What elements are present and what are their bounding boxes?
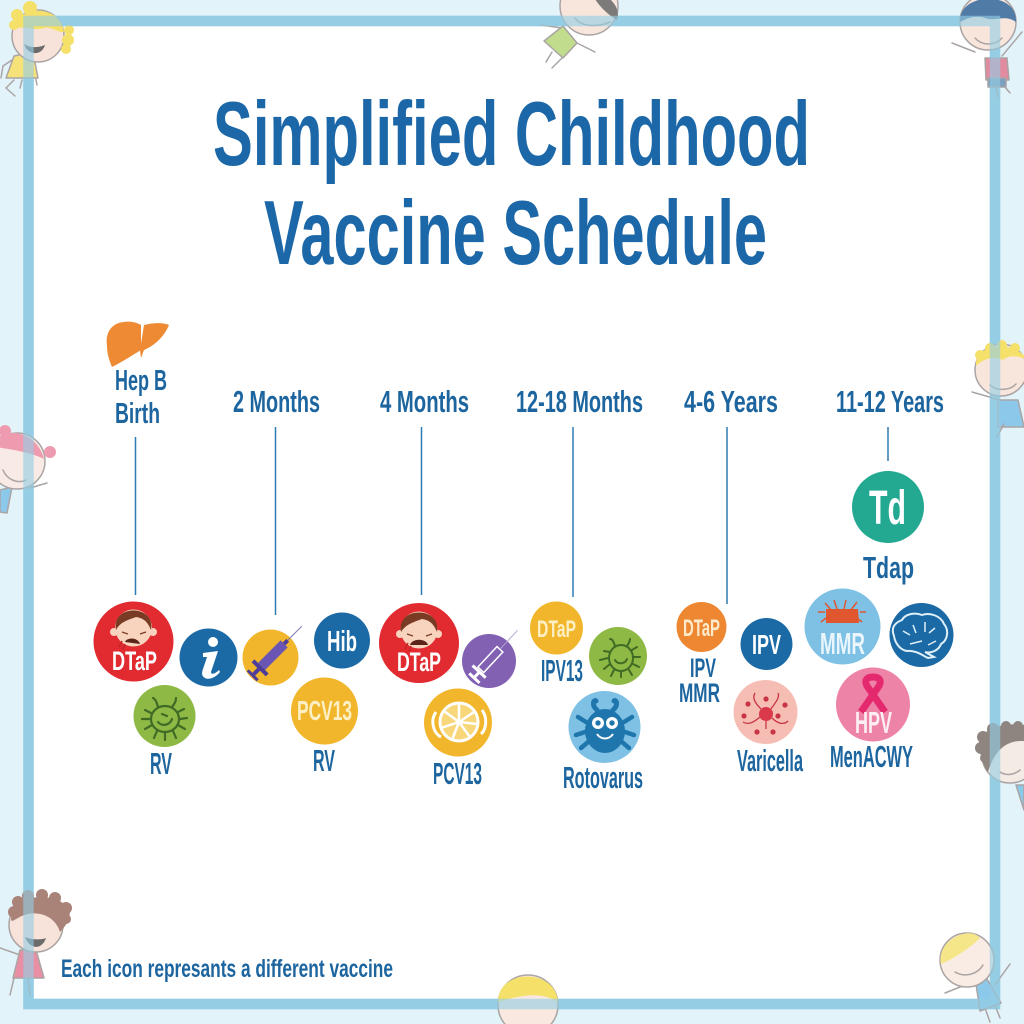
icon: DTaP yellow: DTaP — [537, 616, 576, 643]
icon: Hib — [314, 612, 370, 668]
label: 2 Months: 2 Months — [233, 384, 320, 419]
icon: IPV: IPV — [752, 629, 781, 660]
title — [213, 84, 810, 284]
icon: brain — [890, 603, 954, 667]
decoration: child right upper — [972, 340, 1024, 437]
icon: MMR — [804, 588, 880, 664]
icon: HPV ribbon — [836, 668, 910, 742]
icon: Td: Td — [869, 482, 906, 535]
label: 11-12 Years: 11-12 Years — [836, 384, 944, 419]
label: 4 Months: 4 Months — [380, 384, 469, 419]
decoration: child top right — [952, 0, 1022, 97]
label: IPV MMR: IPV — [690, 653, 716, 683]
icon: Varicella virus — [734, 680, 798, 744]
label: IPV MMR: MMR — [679, 678, 720, 708]
decoration: child bottom centre — [498, 975, 558, 1024]
icon: syringe on purple — [462, 624, 524, 688]
decoration: child top centre — [541, 0, 618, 68]
icon: DTaP orange: DTaP — [683, 615, 720, 642]
label: Varicella: Varicella — [737, 743, 803, 778]
decoration: child left — [0, 425, 56, 513]
icon: DTaP yellow — [530, 602, 583, 654]
footnote: Each icon represants a different vaccine — [61, 955, 393, 983]
icon: PCV13: PCV13 — [297, 695, 352, 726]
icon: MMR: MMR — [820, 626, 865, 661]
icon: DTaP red with sick child — [94, 602, 174, 682]
timeline connector lines — [136, 427, 888, 615]
label: Hep B Birth — [115, 365, 167, 430]
icon: syringe on yellow — [242, 619, 309, 686]
decoration: child top left — [1, 1, 74, 96]
icon: green bug — [589, 627, 647, 685]
icon: DTaP orange — [676, 602, 726, 652]
label: RV second: RV — [313, 743, 335, 778]
icon: DTaP red second dose: DTaP — [397, 647, 441, 677]
icon: Rotavirus bug — [568, 691, 640, 763]
label: Hep B Birth: Birth — [115, 398, 160, 430]
icon: RV green bug — [134, 685, 196, 747]
label: Hep B Birth: Hep B — [115, 365, 167, 397]
label: Tdap: Tdap — [863, 550, 914, 585]
icon: Hib: Hib — [327, 626, 357, 658]
icon: IPV — [740, 618, 792, 670]
label: MenACWY: MenACWY — [830, 739, 913, 774]
label: RV: RV — [150, 746, 172, 781]
title: Vaccine Schedule — [264, 183, 767, 284]
icon: info circle — [180, 628, 238, 686]
icon: HPV ribbon: HPV — [855, 705, 892, 740]
text: IPV13 — [541, 653, 583, 688]
icon: lemon slice — [424, 688, 492, 756]
text: PCV13 — [433, 756, 482, 791]
decoration: child bottom right — [940, 933, 1010, 1022]
label: 12-18 Months: 12-18 Months — [516, 384, 643, 419]
label: IPV MMR — [679, 653, 720, 708]
label: 4-6 Years: 4-6 Years — [684, 384, 778, 419]
icon: DTaP red with sick child: DTaP — [112, 646, 157, 676]
decoration: child bottom left — [0, 889, 72, 995]
icon: Td — [852, 471, 924, 543]
icon: liver — [107, 322, 169, 367]
icon: PCV13 — [291, 678, 358, 744]
label: Rotovarus: Rotovarus — [563, 760, 643, 795]
decoration: child right lower — [975, 721, 1024, 810]
icon: DTaP red second dose — [379, 603, 459, 683]
